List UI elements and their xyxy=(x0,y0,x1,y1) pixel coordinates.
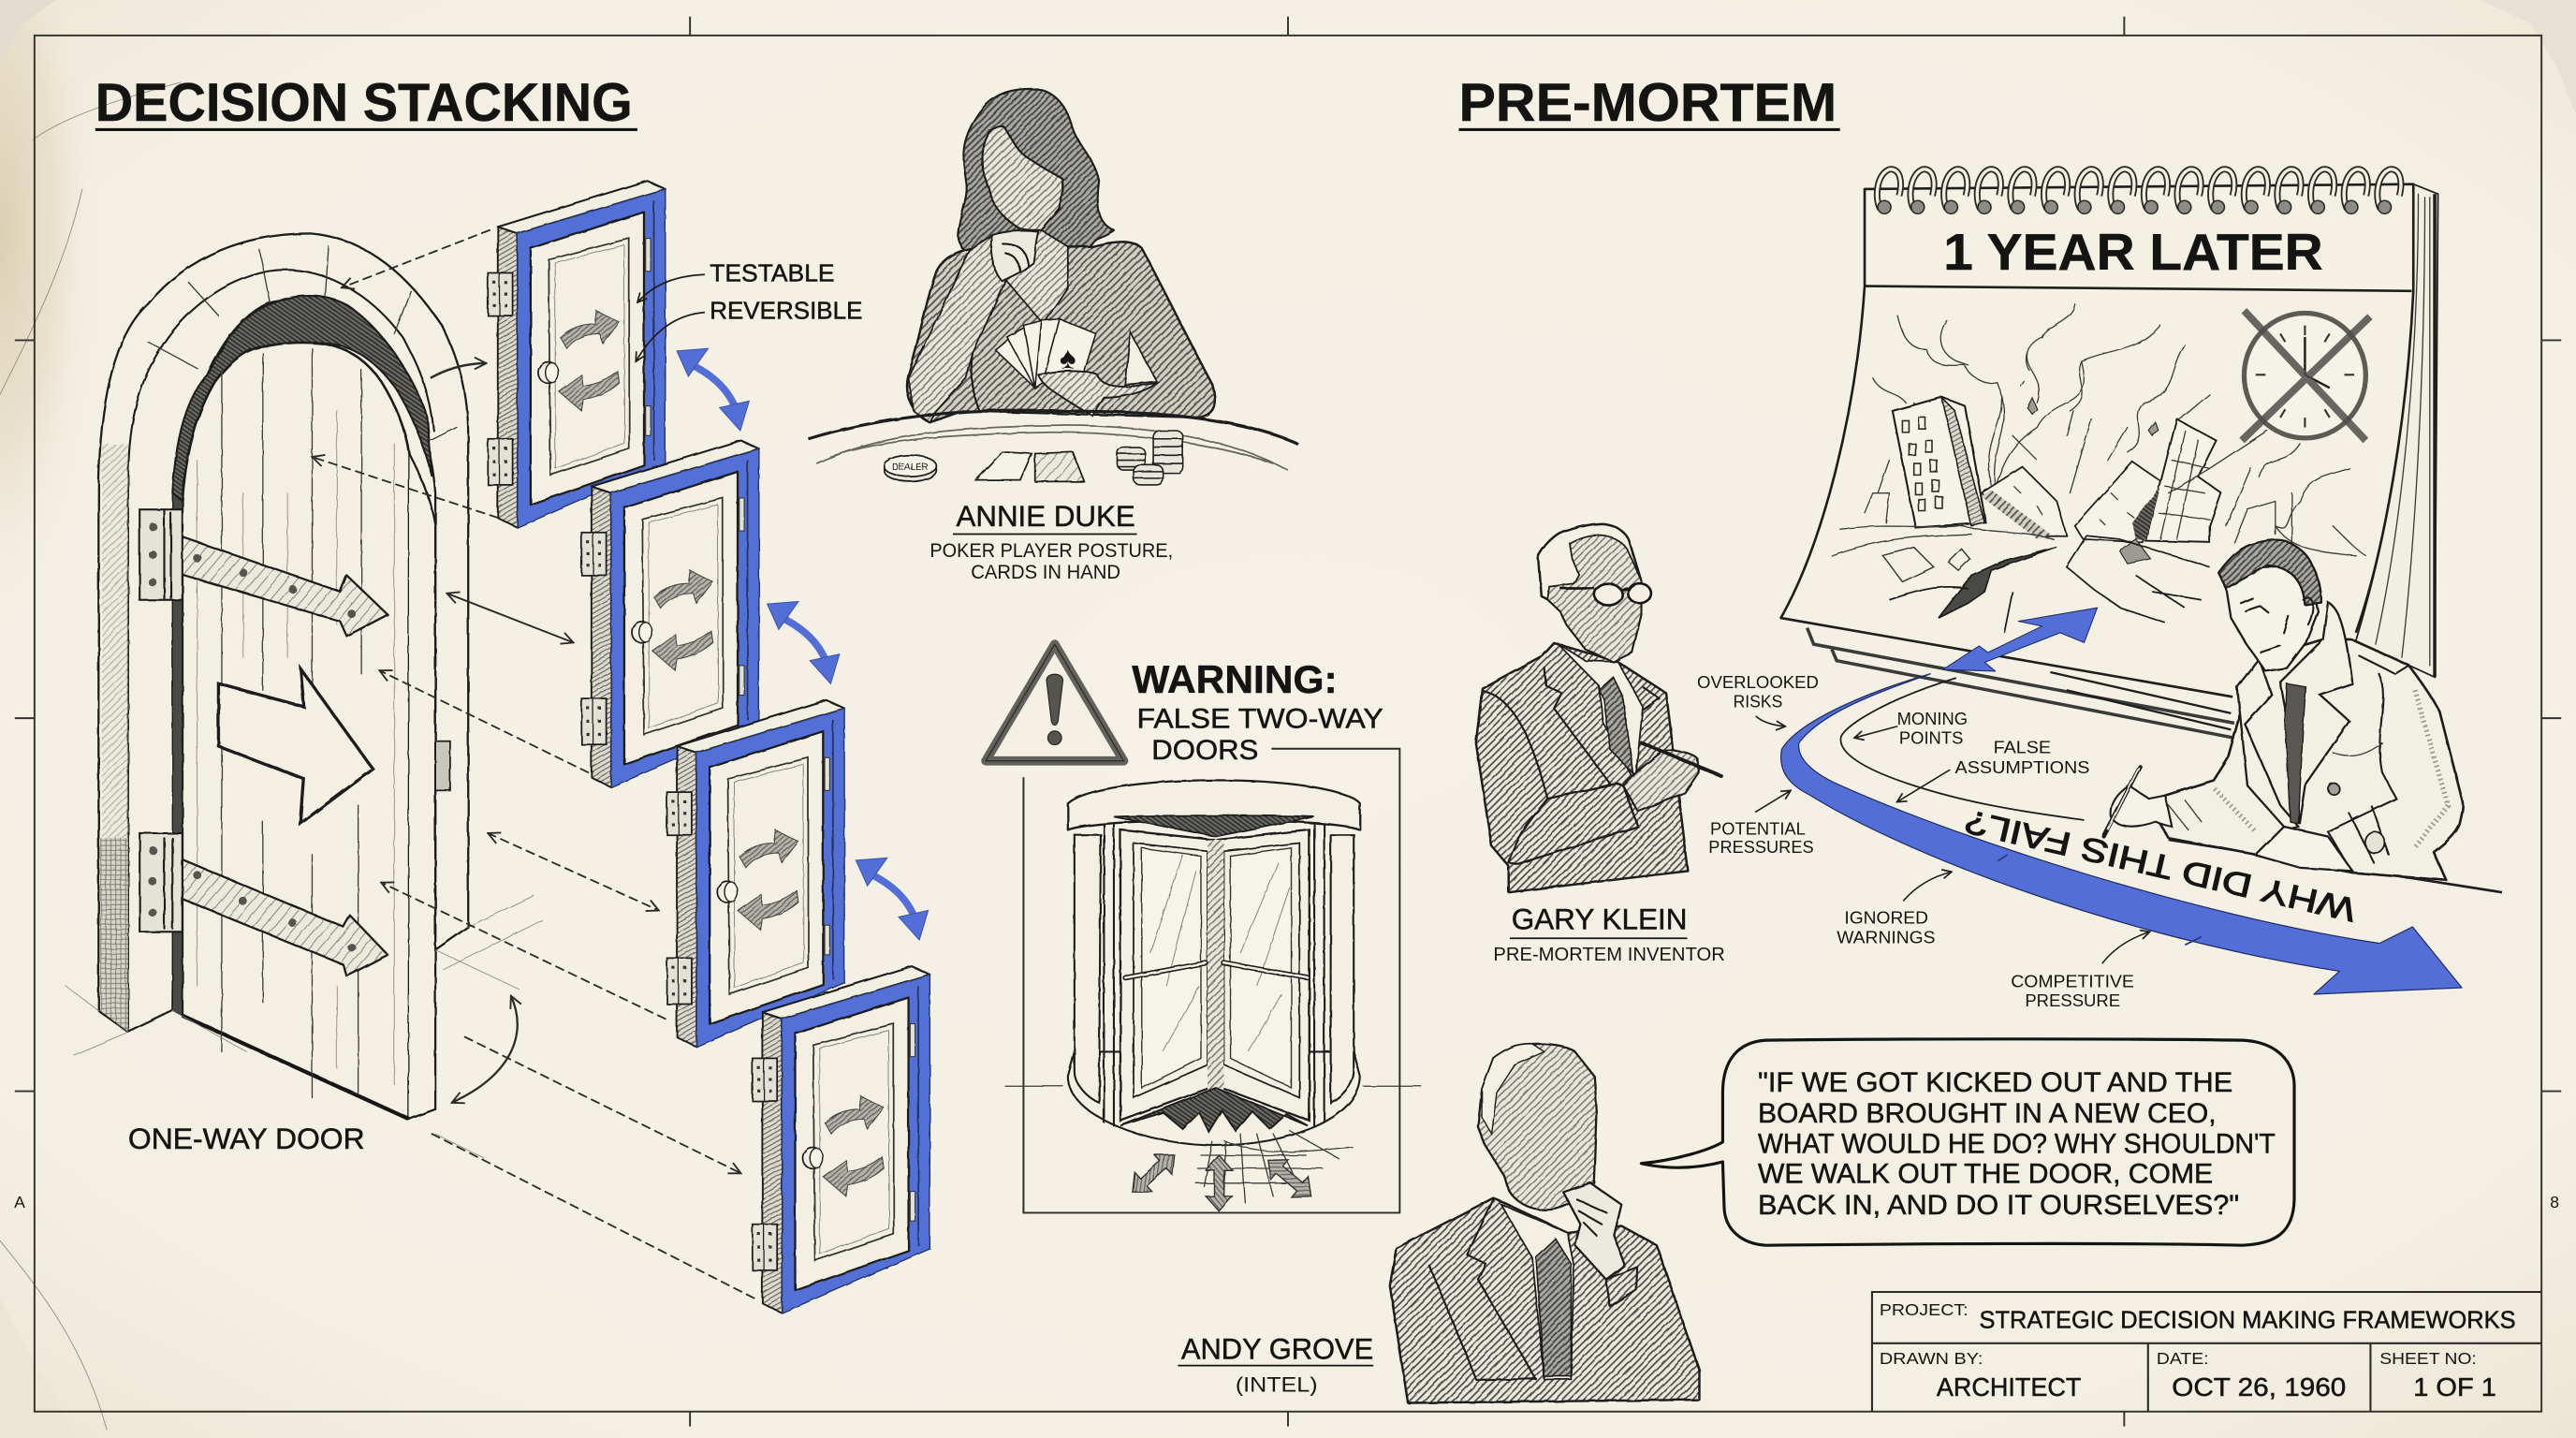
warning text: DOORS xyxy=(1151,735,1258,766)
figure: gary klein xyxy=(1476,523,1720,892)
title block: SHEET NO: xyxy=(2379,1349,2477,1368)
front page xyxy=(1781,184,2413,697)
writing hand and pen xyxy=(2111,785,2172,827)
failure cause labels: IGNORED xyxy=(1844,908,1928,928)
blue swing arrow 3 xyxy=(856,858,929,940)
door leaf xyxy=(183,343,409,1119)
blue two-way door 1 xyxy=(488,181,666,528)
head xyxy=(1478,1044,1597,1210)
failure cause labels: ASSUMPTIONS xyxy=(1955,757,2089,777)
hand holding cards xyxy=(1038,371,1157,416)
hand and arm xyxy=(1563,1182,1625,1280)
fanned cards xyxy=(996,319,1096,388)
chip stacks xyxy=(1117,431,1183,485)
panel: revolving door frame xyxy=(1023,749,1399,1212)
quote speech bubble xyxy=(1641,1039,2294,1245)
title block: DATE: xyxy=(2157,1349,2209,1368)
quote speech bubble: BACK IN, AND DO IT OURSELVES?" xyxy=(1758,1190,2239,1221)
tie xyxy=(1536,1239,1571,1376)
stone arch and door wall xyxy=(98,233,468,1032)
floor arrows xyxy=(1124,1145,1183,1202)
destruction scene xyxy=(1832,304,2365,633)
blue two-way door 2 xyxy=(581,441,759,787)
title block: ARCHITECT xyxy=(1937,1372,2081,1401)
suit xyxy=(1476,643,1688,892)
failure cause labels: MONING xyxy=(1897,709,1968,728)
warning text xyxy=(1132,657,1383,766)
lower strap hinge xyxy=(139,833,388,976)
title block: OCT 26, 1960 xyxy=(2172,1372,2346,1401)
blue double arrow into calendar xyxy=(1943,608,2098,671)
one-way door illustration xyxy=(66,233,542,1158)
side page stack xyxy=(2356,184,2438,677)
failure cause labels: OVERLOOKED xyxy=(1697,672,1819,692)
sheet frame with registration ticks: 8 xyxy=(2550,1193,2559,1211)
calendar: 1 year later: 1 YEAR LATER xyxy=(1943,224,2323,281)
failure cause labels: WARNINGS xyxy=(1837,928,1936,947)
caption: annie duke: POKER PLAYER POSTURE, xyxy=(929,540,1173,562)
collapsing left tower xyxy=(1893,397,1985,528)
shirt xyxy=(1557,643,1643,783)
neck xyxy=(1005,228,1068,324)
failure cause labels: FALSE xyxy=(1994,738,2051,757)
tie xyxy=(2285,683,2305,823)
coat collar xyxy=(2237,603,2352,829)
glasses xyxy=(1560,583,1651,606)
failure cause labels: COMPETITIVE xyxy=(2011,971,2134,990)
failure cause labels: PRESSURES xyxy=(1708,837,1814,857)
caption: annie duke: CARDS IN HAND xyxy=(971,562,1120,583)
blue two-way door 4 xyxy=(753,966,929,1313)
figure: andy grove xyxy=(1390,1044,1699,1402)
title block: DRAWN BY: xyxy=(1880,1349,1983,1368)
blue swing arrow 1 xyxy=(677,348,749,431)
failure cause labels: RISKS xyxy=(1734,692,1782,712)
figure: man in trench coat writing xyxy=(2104,540,2463,880)
shirt xyxy=(1501,1205,1573,1379)
door arrow xyxy=(218,668,373,823)
failure cause labels xyxy=(1697,672,2150,1010)
hair xyxy=(958,89,1114,283)
caption: annie duke: ANNIE DUKE xyxy=(956,499,1135,533)
door wings xyxy=(1120,829,1310,1121)
table edge xyxy=(809,410,1298,444)
collapsed houses xyxy=(1982,467,2067,536)
caption: gary klein: PRE-MORTEM INVENTOR xyxy=(1493,945,1725,965)
collapsing right tower xyxy=(2132,419,2221,542)
hair and head xyxy=(2226,567,2318,671)
label: one-way door: ONE-WAY DOOR xyxy=(128,1122,365,1155)
icon: warning triangle xyxy=(986,644,1123,761)
head xyxy=(1538,523,1641,662)
coat body xyxy=(2149,639,2463,880)
figure: annie duke at poker table: ♠ xyxy=(1060,341,1076,375)
blue swing arrow 2 xyxy=(768,602,840,683)
spiral binding xyxy=(1877,169,2401,213)
caption: andy grove: ANDY GROVE xyxy=(1181,1332,1373,1366)
dealer chip: DEALER xyxy=(892,462,929,473)
revolving door illustration xyxy=(1005,780,1421,1211)
callouts: testable and reversible xyxy=(636,258,862,361)
calendar: 1 year later xyxy=(1781,169,2438,740)
forearm xyxy=(1508,784,1638,864)
quote speech bubble: WE WALK OUT THE DOOR, COME xyxy=(1758,1158,2213,1189)
raised hand xyxy=(991,231,1038,281)
callouts: testable and reversible: TESTABLE xyxy=(710,258,835,286)
warning text: WARNING: xyxy=(1132,657,1338,701)
epaulette xyxy=(2359,655,2408,799)
title block xyxy=(1872,1292,2541,1412)
caption: gary klein xyxy=(1493,902,1725,965)
warning text: FALSE TWO-WAY xyxy=(1137,704,1383,735)
caption: gary klein: GARY KLEIN xyxy=(1512,902,1687,936)
floor teeth xyxy=(1120,1088,1308,1132)
debris and skyline xyxy=(1832,381,2365,555)
blue two-way door 3 xyxy=(667,700,844,1047)
suit xyxy=(1390,1198,1699,1402)
figure: annie duke at poker table xyxy=(809,89,1298,485)
dealer chip xyxy=(884,455,936,481)
drum floor xyxy=(1068,1051,1360,1145)
sleeve and cuff xyxy=(2328,799,2396,873)
title block: PROJECT: xyxy=(1880,1300,1969,1319)
heading: pre-mortem: PRE-MORTEM xyxy=(1459,73,1837,133)
caption: andy grove: (INTEL) xyxy=(1236,1373,1318,1397)
failure cause labels: POTENTIAL xyxy=(1710,819,1806,839)
tie xyxy=(1599,677,1633,774)
heading: decision stacking: DECISION STACKING xyxy=(95,73,633,133)
torso and arms xyxy=(907,242,1215,422)
hand and pen xyxy=(1623,751,1699,812)
blue sweeping arrow xyxy=(1781,674,2462,994)
sheet frame with registration ticks: A xyxy=(14,1193,25,1211)
failure cause labels: POINTS xyxy=(1899,728,1963,748)
smoke xyxy=(1873,304,2356,555)
connector arrows between door and stack xyxy=(312,230,757,1299)
failure cause labels: PRESSURE xyxy=(2025,990,2120,1010)
thin failure path line xyxy=(1840,678,2085,820)
quote speech bubble: BOARD BROUGHT IN A NEW CEO, xyxy=(1758,1098,2217,1129)
callouts: testable and reversible: REVERSIBLE xyxy=(710,297,862,325)
face xyxy=(983,126,1063,230)
upper strap hinge xyxy=(139,509,388,636)
quote speech bubble: "IF WE GOT KICKED OUT AND THE xyxy=(1758,1067,2232,1098)
quote speech bubble: WHAT WOULD HE DO? WHY SHOULDN'T xyxy=(1758,1129,2276,1160)
caption: andy grove xyxy=(1178,1332,1373,1397)
title block: STRATEGIC DECISION MAKING FRAMEWORKS xyxy=(1980,1307,2516,1333)
caption: annie duke xyxy=(929,499,1173,583)
title block: 1 OF 1 xyxy=(2413,1372,2496,1401)
ground crack xyxy=(1889,536,2210,633)
resting hand xyxy=(2256,827,2352,871)
drum top xyxy=(1068,780,1360,829)
under pages xyxy=(1808,628,2243,740)
desk edge xyxy=(2169,840,2502,892)
side windows xyxy=(1075,835,1101,1103)
text on arrow: why did this fail: WHY DID THIS FAIL? xyxy=(1962,802,2359,928)
crossed-out clock xyxy=(2242,311,2370,441)
